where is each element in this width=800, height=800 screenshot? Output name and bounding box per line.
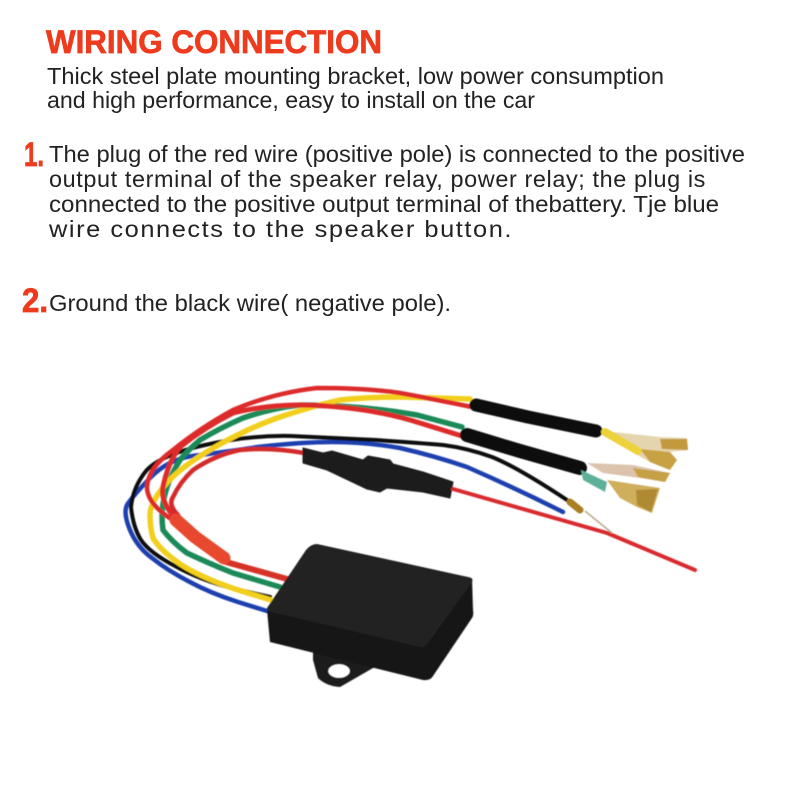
black module body <box>267 544 473 680</box>
red wire: second branch <box>162 405 462 517</box>
step 2 text: Ground the black wire( negative pole). <box>49 290 451 316</box>
ring terminal and thin lead <box>570 502 612 533</box>
module fixing tab <box>313 650 385 687</box>
lower black heat-shrink <box>467 435 580 468</box>
step 1 text: connected to the positive output terminal of thebattery. Tje blue <box>49 191 719 217</box>
intro text block: and high performance, easy to install on the car <box>47 87 535 113</box>
step 1 text: wire connects to the speaker button. <box>48 216 513 242</box>
step 1 text: output terminal of the speaker relay, power relay; the plug is <box>49 166 706 192</box>
yellow wire <box>150 397 470 600</box>
step 1 text <box>48 141 745 242</box>
red heat-shrink sleeve <box>176 520 224 558</box>
red wire: module end <box>226 562 287 579</box>
step 1 text: The plug of the red wire (positive pole) is connected to the positive <box>49 141 745 167</box>
red output wire <box>453 489 695 570</box>
step 2 number: 2. <box>22 282 48 320</box>
module top face <box>267 544 472 647</box>
intro text block <box>47 63 664 113</box>
module side faces <box>267 578 473 680</box>
red wire: fuse branch <box>171 449 304 515</box>
middle pink spade terminal <box>587 463 670 482</box>
upper black heat-shrink <box>476 405 596 431</box>
step 1 number: 1. <box>24 136 44 174</box>
intro text block: Thick steel plate mounting bracket, low power consumption <box>47 63 664 89</box>
blue wire <box>126 442 563 611</box>
title: WIRING CONNECTION <box>46 24 382 60</box>
product photo: wiring harness <box>126 388 695 687</box>
inline fuse holder <box>303 448 453 498</box>
top yellow spade terminal <box>605 432 688 470</box>
green wire <box>162 405 462 587</box>
lower green spade terminal <box>581 470 660 513</box>
black wire <box>131 436 567 597</box>
red wire: upper branch <box>147 388 472 522</box>
